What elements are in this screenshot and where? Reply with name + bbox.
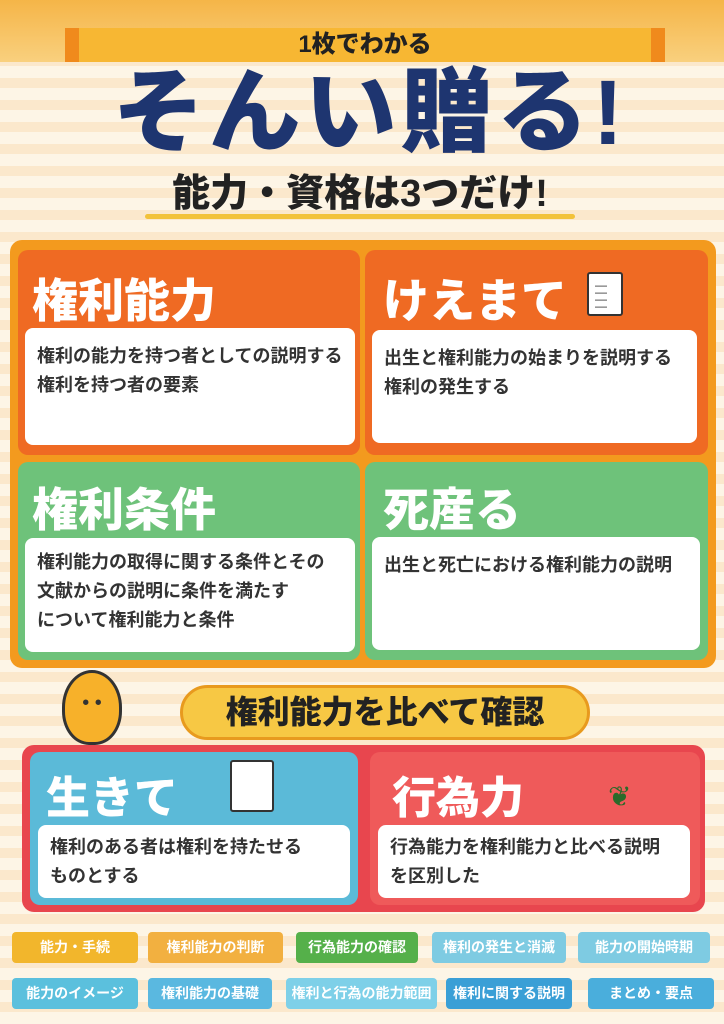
text block: 権利能力の取得に関する条件とその <box>37 552 324 572</box>
bottom panel <box>22 745 705 912</box>
text block: を区別した <box>390 866 480 886</box>
icon: document: — <box>595 299 607 313</box>
icon: sprout: ❦ <box>608 781 631 812</box>
card: 行為力 <box>370 752 700 905</box>
text block: 出生と死亡における権利能力の説明 <box>384 555 672 575</box>
tags: 権利と行為の能力範囲 <box>292 985 432 1001</box>
card: 権利条件 <box>18 462 360 660</box>
text block: 行為能力を権利能力と比べる説明 <box>390 837 660 857</box>
ribbon header <box>65 28 665 62</box>
tags: 能力の開始時期 <box>595 939 693 955</box>
text block: 権利の発生する <box>384 377 510 397</box>
tags: 権利能力の基礎 <box>161 985 259 1001</box>
card: けえまて <box>365 250 708 455</box>
text block <box>372 537 700 650</box>
ribbon header: 1枚でわかる <box>298 31 432 58</box>
tags: まとめ・要点 <box>609 985 693 1001</box>
icon: document: — <box>595 292 607 306</box>
card: 死産る <box>365 462 708 660</box>
heading: けえまて <box>383 275 567 327</box>
text block: について権利能力と条件 <box>37 610 234 630</box>
heading: 権利条件 <box>32 484 216 536</box>
main panel <box>10 240 716 668</box>
icon: document: — <box>595 285 607 299</box>
icon: document <box>587 272 623 316</box>
text block: 権利を持つ者の要素 <box>37 375 199 395</box>
text block: 権利の能力を持つ者としての説明する <box>37 346 342 366</box>
icon: document <box>230 760 274 812</box>
text block: 権利のある者は権利を持たせる <box>50 837 302 857</box>
tags: 権利能力の判断 <box>166 939 264 955</box>
heading: 行為力 <box>392 774 524 823</box>
title: そんい贈る! <box>113 62 627 164</box>
tags: 権利に関する説明 <box>453 985 565 1001</box>
tags: 能力のイメージ <box>26 985 124 1001</box>
tags: 権利の発生と消滅 <box>443 939 555 955</box>
underline <box>145 214 575 219</box>
text block: ものとする <box>50 866 139 886</box>
tags <box>12 932 714 1009</box>
heading: 死産る <box>383 484 521 536</box>
icon: character <box>62 670 122 745</box>
card: 生きて <box>30 752 358 905</box>
icon: character: • • <box>82 692 102 714</box>
text block <box>378 825 690 898</box>
text block <box>372 330 697 443</box>
text block <box>25 538 355 652</box>
subtitle: 能力・資格は3つだけ! <box>172 173 548 215</box>
tags: 行為能力の確認 <box>308 939 406 955</box>
banner: 権利能力を比べて確認 <box>226 694 544 730</box>
tags: 能力・手続 <box>40 939 110 955</box>
text block <box>38 825 350 898</box>
text block <box>25 328 355 445</box>
card: 権利能力 <box>18 250 360 455</box>
text block: 文献からの説明に条件を満たす <box>37 581 289 601</box>
heading: 権利能力 <box>32 275 216 327</box>
banner <box>180 685 590 740</box>
icon: document: — <box>595 278 607 292</box>
heading: 生きて <box>46 774 178 823</box>
top band <box>0 0 724 62</box>
text block: 出生と権利能力の始まりを説明する <box>384 348 672 368</box>
